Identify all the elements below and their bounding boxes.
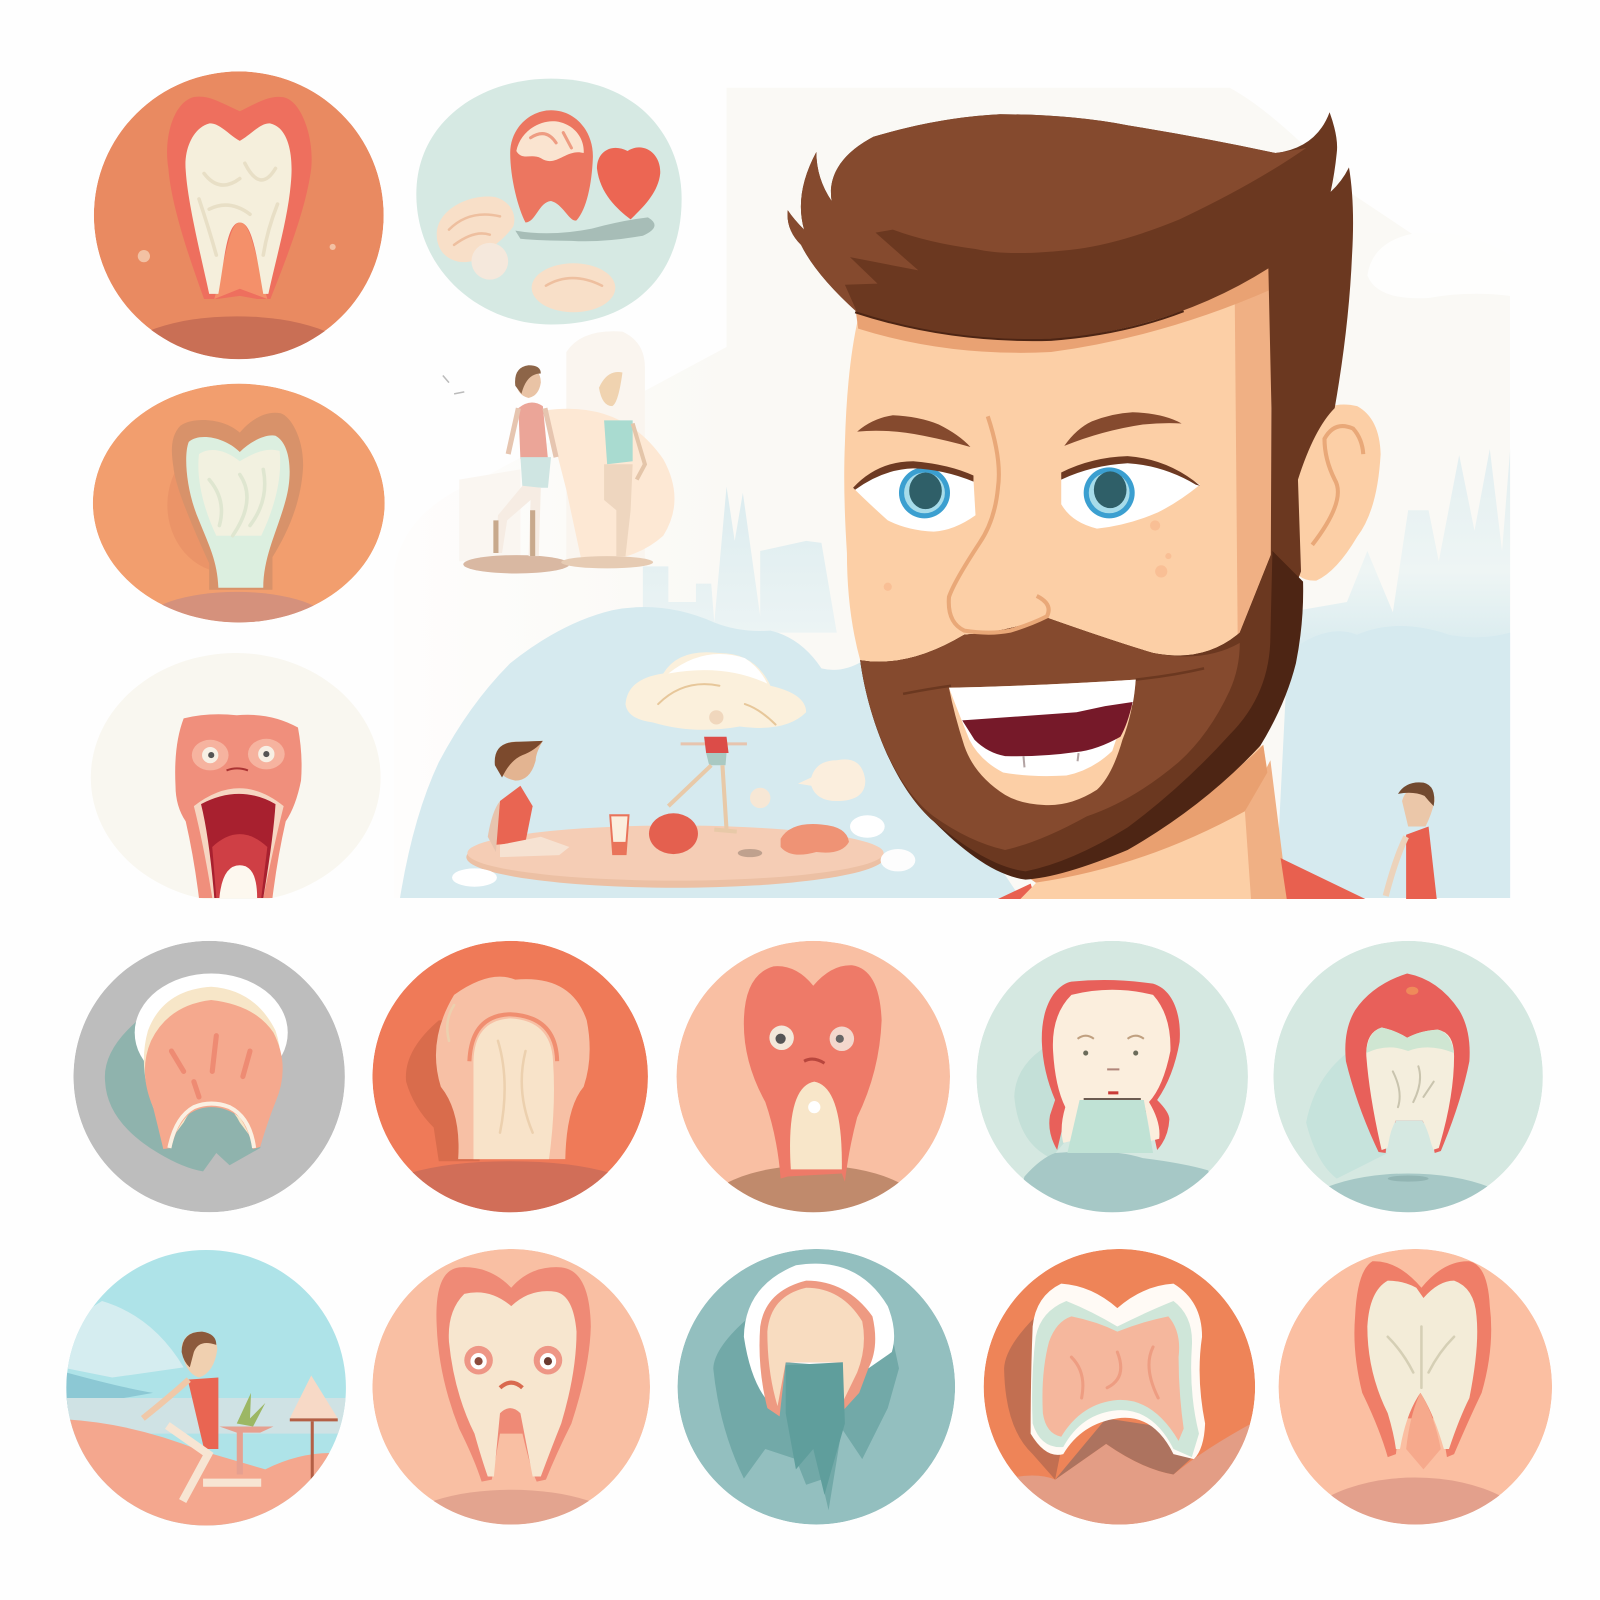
panel: circle teal tooth <box>678 1249 955 1524</box>
platform <box>452 815 915 888</box>
panel: round tooth 2 <box>92 384 385 622</box>
figure: right person <box>561 372 653 568</box>
neck and shirt <box>998 745 1365 899</box>
panel: two standing figures <box>443 331 674 573</box>
panel: man face <box>788 112 1381 899</box>
panel: round tooth 3 with mouth <box>91 653 381 902</box>
panel: seated boy and platform <box>452 652 915 888</box>
panel: circle orange tooth pink core <box>984 1249 1260 1531</box>
face skin <box>844 255 1270 735</box>
red tooth <box>649 813 698 854</box>
skyline: centre <box>643 487 837 633</box>
orange bean <box>781 824 849 855</box>
panel: teeth and brain blob group <box>416 79 682 324</box>
skin band under hair <box>855 255 1270 353</box>
panel: circle tooth with face <box>676 941 950 1212</box>
lamp <box>290 1376 338 1480</box>
small cloud and pebbles <box>750 759 865 808</box>
panel: circle peach tooth <box>1278 1249 1552 1524</box>
panel: circle exercising boy <box>61 1245 352 1531</box>
hair underline <box>855 311 1184 340</box>
cloud <box>626 652 806 730</box>
beard <box>860 551 1303 880</box>
eye left <box>853 461 976 532</box>
skyline: right <box>1299 450 1510 645</box>
cup <box>609 814 630 855</box>
plant on table <box>219 1393 273 1474</box>
figure: small boy standing <box>1386 782 1437 899</box>
panel: circle orange tooth <box>372 941 648 1224</box>
skin shading <box>1235 276 1271 645</box>
hair back <box>788 112 1353 653</box>
boy seated <box>488 741 569 857</box>
cloud: top right <box>1367 232 1510 298</box>
icon: birds <box>443 376 464 394</box>
figure: left person <box>463 365 569 573</box>
freckles <box>884 520 1171 591</box>
dancing figure <box>668 710 747 832</box>
panel: circle grey tooth <box>73 941 345 1212</box>
eyebrow right <box>1064 412 1182 446</box>
panel: main scene background <box>394 88 1510 898</box>
mouth <box>949 680 1136 805</box>
ground: right blue <box>1279 626 1433 862</box>
eyebrow left <box>857 415 970 447</box>
hill <box>400 607 1020 898</box>
boy figure <box>143 1332 261 1501</box>
panel: round tooth 1 <box>94 71 384 360</box>
hair light top <box>788 114 1306 312</box>
nose <box>949 416 1049 633</box>
panel: circle mint tooth face <box>977 941 1248 1224</box>
panel: circle cream tooth wide eyes <box>372 1249 650 1524</box>
ear <box>1291 404 1381 581</box>
eye right <box>1061 456 1200 529</box>
panel: circle mint tooth red crown <box>1274 941 1543 1212</box>
